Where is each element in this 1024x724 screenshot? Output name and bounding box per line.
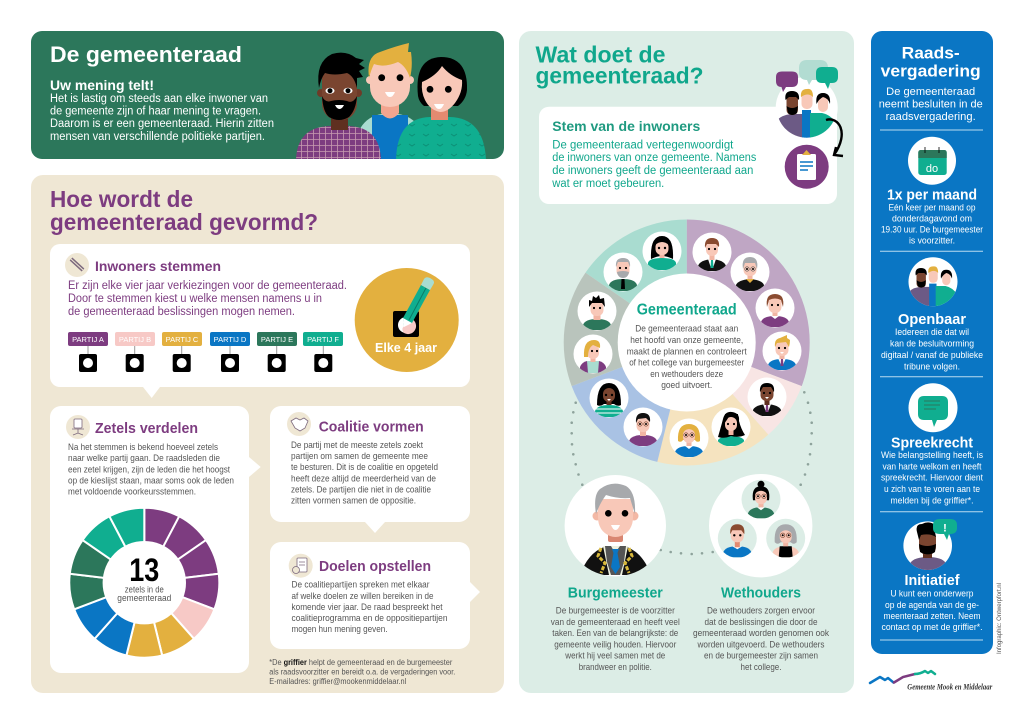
heading: Wat doet de bbox=[536, 41, 666, 67]
section: 1x per maand: donderdagavond om bbox=[892, 214, 972, 224]
section: 1x per maand bbox=[881, 137, 983, 246]
card text: zitten vormen samen de oppositie. bbox=[291, 496, 416, 506]
heading: gemeenteraad gevormd? bbox=[50, 209, 318, 235]
ballot: party labels and boxes: PARTIJ F bbox=[307, 335, 339, 344]
ballot: party labels and boxes: PARTIJ A bbox=[72, 335, 104, 344]
woman right bbox=[396, 117, 486, 160]
section: openbaar: Iedereen die dat wil bbox=[895, 327, 969, 338]
text block: wethouders: en de burgemeester zijn samen bbox=[704, 651, 818, 662]
intro text: Het is lastig om steeds aan elke inwoner van bbox=[50, 93, 268, 105]
heading: vergadering bbox=[881, 62, 981, 81]
ballot: party labels and boxes bbox=[68, 332, 343, 372]
section: initiatief: Initiatief bbox=[904, 572, 960, 589]
card text: de inwoners geeft de gemeenteraad aan bbox=[552, 165, 753, 177]
ring text bbox=[627, 324, 747, 391]
text block: wethouders: het college. bbox=[740, 662, 782, 673]
card text: Na het stemmen is bekend hoeveel zetels bbox=[68, 442, 218, 453]
ring text: of het college van burgemeester bbox=[629, 358, 744, 369]
intro text: de gemeente zijn of haar mening te vragen. bbox=[50, 106, 261, 118]
icon: handshake bbox=[287, 412, 311, 436]
section: 1x per maand: is voorzitter. bbox=[909, 236, 955, 246]
card text: De partij met de meeste zetels zoekt bbox=[291, 440, 423, 451]
card: stem van de inwoners bbox=[539, 60, 843, 204]
ring text: De gemeenteraad staat aan bbox=[635, 324, 738, 335]
credit: infographic: Infographic: Ontwerpfort.nl bbox=[997, 583, 1003, 654]
icon: residents bbox=[908, 257, 959, 308]
chart: 13 seats donut: zetels in de bbox=[125, 585, 164, 595]
icon: calendar: do bbox=[926, 163, 938, 175]
chart: council ring with members bbox=[564, 220, 810, 465]
section: initiatief: op de agenda van de ge- bbox=[885, 600, 979, 611]
section: 1x per maand: 19.30 uur. De burgemeester bbox=[881, 225, 983, 235]
section: openbaar bbox=[881, 257, 983, 373]
title: de gemeenteraad: De gemeenteraad bbox=[50, 42, 242, 67]
icon: pencil bbox=[65, 253, 89, 277]
heading: Raads- bbox=[902, 43, 960, 62]
panel: hoe wordt de gemeenteraad gevormd bbox=[31, 175, 504, 693]
member: grey haired woman with glasses bbox=[730, 252, 770, 292]
intro text bbox=[50, 93, 274, 143]
member: blonde woman with glasses bbox=[670, 418, 708, 458]
intro text bbox=[879, 86, 983, 123]
card heading: Coalitie vormen bbox=[319, 419, 424, 436]
intro text: mensen van verschillende politieke partijen. bbox=[50, 131, 265, 143]
panel: de gemeenteraad intro bbox=[31, 31, 504, 160]
section: spreekrecht bbox=[881, 383, 983, 507]
icon: clipboard bbox=[289, 554, 313, 578]
text block: burgemeester bbox=[551, 585, 680, 673]
card text: op de kieslijst staan, maar soms ook de leden bbox=[68, 476, 234, 486]
portrait: burgemeester bbox=[565, 475, 666, 576]
member: man with glasses bbox=[624, 408, 662, 446]
card text: naar welke partij gaan. De raadsleden die bbox=[68, 453, 220, 464]
section: spreekrecht: Spreekrecht bbox=[891, 434, 973, 451]
card: zetels verdelen bbox=[50, 406, 261, 673]
member: grey man with beard bbox=[604, 252, 642, 292]
text block: wethouders: dat de beslissingen die door de bbox=[704, 617, 818, 628]
text block: burgemeester: De burgemeester is de voorzitter bbox=[556, 605, 675, 616]
footnote: griffier bbox=[269, 658, 455, 686]
card text bbox=[68, 442, 234, 498]
text block: burgemeester: gemeente veilig houden. Hiervoor bbox=[554, 639, 676, 650]
text block: burgemeester: van de gemeenteraad en heeft veel bbox=[551, 617, 680, 628]
card: coalitie vormen bbox=[270, 406, 470, 533]
icon: speech bubble bbox=[908, 383, 958, 432]
card text: zetels. De partijen die niet in de coalitie bbox=[291, 484, 431, 496]
icon: speech bubbles bbox=[776, 60, 838, 92]
icon: clipboard badge bbox=[785, 145, 829, 189]
member: man in dark suit bbox=[748, 378, 786, 416]
card heading: Stem van de inwoners bbox=[552, 118, 701, 134]
wethouder: grey haired woman bbox=[766, 519, 805, 558]
card text: een zetel krijgen, zijn de leden die het hoogst bbox=[68, 464, 230, 475]
card: doelen opstellen bbox=[270, 542, 480, 649]
blond man behind bbox=[360, 114, 414, 135]
section: initiatief bbox=[882, 519, 982, 633]
heading: gemeenteraad? bbox=[536, 62, 704, 88]
ring text: het hoofd van onze gemeente, bbox=[630, 335, 743, 346]
member: woman with long black hair bbox=[712, 408, 750, 446]
card text bbox=[292, 580, 448, 635]
decorative dots bbox=[570, 391, 813, 555]
ring text: goed uitvoert. bbox=[661, 380, 712, 391]
section: spreekrecht: melden bij de griffier*. bbox=[890, 496, 974, 507]
icon: chair bbox=[66, 415, 90, 439]
card text: coalitieprogramma en de oppositiepartijen bbox=[292, 613, 448, 624]
card text: de inwoners van onze gemeente. Namens bbox=[552, 152, 757, 164]
member: brown haired person in purple bbox=[756, 288, 794, 328]
card text: heeft deze altijd de meerderheid van de bbox=[291, 474, 436, 484]
badge: elke 4 jaar bbox=[355, 268, 459, 372]
card heading: Zetels verdelen bbox=[95, 420, 198, 437]
card text: komende vier jaar. De raad bespreekt het bbox=[292, 602, 443, 613]
intro text: De gemeenteraad bbox=[886, 86, 975, 98]
card text: Er zijn elke vier jaar verkiezingen voor de gemeenteraad. bbox=[68, 280, 347, 292]
section: openbaar: Openbaar bbox=[898, 311, 966, 328]
subheading: uw mening telt: Uw mening telt! bbox=[50, 77, 154, 93]
ring title: Gemeenteraad bbox=[637, 301, 737, 318]
text block: burgemeester: werkt hij veel samen met de bbox=[564, 651, 665, 662]
logo: gemeente mook en middelaar: Gemeente Mook en Middelaar bbox=[907, 682, 993, 691]
card text: De gemeenteraad vertegenwoordigt bbox=[552, 139, 734, 151]
text block: burgemeester: taken. Een van de belangrijkste: de bbox=[552, 628, 678, 639]
chart: 13 seats donut: gemeenteraad bbox=[117, 593, 171, 603]
icon: man with exclamation bubble: ! bbox=[943, 522, 947, 534]
card text bbox=[551, 139, 757, 190]
card heading: Doelen opstellen bbox=[319, 558, 431, 575]
member: woman with glasses bbox=[642, 232, 682, 270]
section: openbaar: tribune volgen. bbox=[904, 362, 960, 373]
panel: raadsvergadering bbox=[871, 31, 993, 654]
chart: 13 seats donut: 13 bbox=[129, 552, 159, 588]
ballot: party labels and boxes: PARTIJ C bbox=[166, 335, 199, 344]
section: 1x per maand: 1x per maand bbox=[887, 186, 977, 203]
heading bbox=[881, 43, 981, 81]
ballot: party labels and boxes: PARTIJ E bbox=[261, 335, 293, 344]
member: woman with dark curls bbox=[590, 378, 628, 418]
text block: wethouders: Wethouders bbox=[721, 585, 801, 601]
text block: wethouders bbox=[693, 585, 829, 673]
card: inwoners stemmen bbox=[50, 244, 470, 398]
footnote: griffier: *De griffier helpt de gemeenteraad en de burgemeester bbox=[269, 658, 453, 667]
card text: de gemeenteraad beslissingen mogen nemen. bbox=[68, 306, 295, 318]
card text bbox=[68, 280, 347, 318]
card heading: Inwoners stemmen bbox=[95, 258, 221, 274]
ring text: en wethouders deze bbox=[650, 369, 723, 380]
intro text: neemt besluiten in de bbox=[879, 99, 983, 111]
member: blonde woman bbox=[574, 334, 612, 374]
member: man with dark spiky hair bbox=[578, 292, 616, 330]
text block: burgemeester: brandweer en politie. bbox=[579, 662, 652, 673]
text block: wethouders: gemeenteraad worden genomen ook bbox=[693, 628, 829, 639]
card text: af welke doelen ze willen bereiken in de bbox=[292, 591, 434, 602]
icon: residents group bbox=[778, 88, 834, 138]
section: spreekrecht: van harte welkom en heeft bbox=[882, 462, 982, 473]
text block: wethouders: De wethouders zorgen ervoor bbox=[707, 605, 815, 616]
footnote: griffier: E-mailadres: griffier@mookenmiddelaar.nl bbox=[269, 677, 406, 686]
footnote: griffier: als raadsvoorzitter en bereidt o.a. de vergaderingen voor. bbox=[269, 668, 455, 676]
illustration: three residents bbox=[296, 43, 486, 160]
section: 1x per maand: Eén keer per maand op bbox=[888, 202, 976, 212]
section: spreekrecht: Wie belangstelling heeft, is bbox=[881, 450, 983, 461]
intro text: raadsvergadering. bbox=[886, 111, 976, 123]
ballot: party labels and boxes: PARTIJ D bbox=[214, 335, 247, 344]
heading: Hoe wordt de bbox=[50, 186, 193, 212]
panel: wat doet de gemeenteraad bbox=[519, 31, 854, 693]
card text: partijen om samen de gemeente mee bbox=[291, 451, 428, 462]
heading bbox=[50, 186, 318, 235]
card text: Door te stemmen kiest u welke mensen namens u in bbox=[68, 293, 322, 305]
wethouder: woman with bun bbox=[742, 480, 780, 519]
card text: mogen hun mening geven. bbox=[292, 624, 388, 635]
wethouder: man with brown hair bbox=[718, 519, 757, 558]
heading bbox=[536, 41, 704, 88]
text block: burgemeester: Burgemeester bbox=[568, 585, 663, 601]
member: brown haired man with teal tie bbox=[692, 232, 732, 272]
section: initiatief: U kunt een onderwerp bbox=[890, 589, 974, 600]
arrow: residents to clipboard bbox=[826, 119, 843, 156]
intro text: Daarom is er een gemeenteraad. Hierin zitten bbox=[50, 118, 274, 130]
badge: elke 4 jaar: Elke 4 jaar bbox=[375, 341, 437, 355]
logo: gemeente mook en middelaar bbox=[870, 671, 993, 691]
section: initiatief: meenteraad zetten. Neem bbox=[884, 611, 981, 622]
member: blond man in blue suit bbox=[762, 332, 802, 370]
portrait: wethouders bbox=[709, 474, 812, 577]
card text: De coalitiepartijen spreken met elkaar bbox=[292, 580, 430, 591]
ring text: maakt de plannen en controleert bbox=[627, 346, 747, 357]
section: spreekrecht: u zich van te voren aan te bbox=[884, 484, 980, 495]
section: spreekrecht: spreekrecht. Hiervoor dient bbox=[881, 473, 983, 484]
section: openbaar: digitaal / vanaf de publieke bbox=[881, 350, 983, 361]
card text: wat er moet gebeuren. bbox=[551, 178, 664, 190]
chart: 13 seats donut bbox=[69, 508, 219, 658]
card text: met voldoende voorkeursstemmen. bbox=[68, 487, 196, 498]
card text bbox=[291, 440, 438, 506]
ballot: party labels and boxes: PARTIJ B bbox=[119, 335, 151, 344]
text block: wethouders: worden uitgevoerd. De wethouders bbox=[697, 639, 825, 650]
section: initiatief: contact op met de griffier*. bbox=[882, 622, 982, 633]
card text: te besturen. Dit is de coalitie en opgeteld bbox=[291, 462, 438, 473]
section: openbaar: kan de besluitvorming bbox=[890, 339, 974, 350]
dark man left bbox=[296, 126, 381, 160]
